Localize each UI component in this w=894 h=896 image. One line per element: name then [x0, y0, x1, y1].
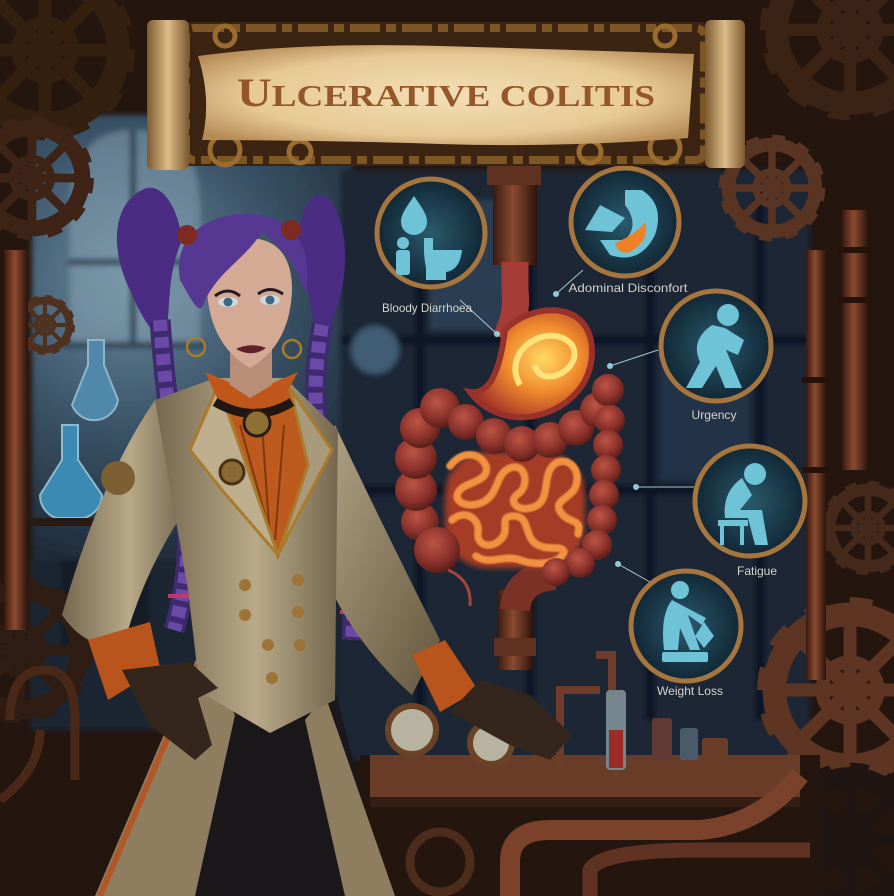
eyes	[218, 297, 238, 307]
symptom: urgency	[661, 291, 771, 422]
shoulder badge	[101, 461, 135, 495]
right arm	[320, 425, 440, 695]
mouth	[236, 345, 266, 353]
left braid	[160, 320, 188, 630]
label: Bloody Diarrhoea	[382, 301, 472, 315]
hair ties	[177, 225, 197, 245]
digestive tract	[395, 262, 625, 606]
left scroll	[147, 20, 189, 170]
earrings	[187, 338, 205, 356]
oesophagus	[505, 262, 516, 340]
central copper pipe	[487, 165, 555, 670]
lapels	[190, 385, 278, 555]
symptom: abdominal discomfort	[568, 168, 688, 295]
frame ornaments	[210, 26, 680, 165]
workbench	[360, 655, 820, 896]
frame pipes	[0, 210, 872, 800]
label: Urgency	[692, 408, 736, 422]
face	[207, 238, 292, 368]
coat tails	[95, 650, 395, 896]
lab flasks	[30, 340, 120, 526]
right scroll	[705, 20, 745, 168]
left arm	[62, 400, 185, 644]
torso	[155, 378, 338, 733]
collar	[205, 372, 298, 412]
blouse	[215, 390, 308, 560]
title banner	[147, 20, 745, 170]
hair top	[179, 214, 308, 308]
banner frame	[180, 22, 710, 166]
connector lines	[460, 270, 694, 582]
symptom: weight loss	[631, 571, 741, 698]
right braid	[316, 325, 353, 640]
label: Adominal Disconfort	[568, 281, 688, 295]
character: steampunk scientist	[62, 188, 572, 896]
stomach	[470, 310, 592, 417]
cuffs	[88, 622, 160, 700]
gloves	[122, 662, 218, 760]
background: laboratory window	[30, 115, 810, 760]
buttons	[239, 574, 306, 684]
trousers	[190, 690, 388, 896]
parchment	[198, 45, 694, 145]
pigtail bunch right	[298, 195, 345, 343]
small intestine	[445, 452, 585, 568]
pigtail bunch left	[117, 188, 182, 337]
lapel gear pin	[220, 460, 244, 484]
label: Weight Loss	[657, 684, 723, 698]
large intestine	[395, 374, 625, 586]
braid ties	[168, 596, 364, 612]
title: ULCERATIVE COLITIS	[237, 70, 655, 115]
symptom: fatigue	[695, 446, 805, 578]
neck	[230, 345, 272, 398]
label: Fatigue	[737, 564, 777, 578]
symptom: bloody diarrhoea	[377, 179, 485, 315]
